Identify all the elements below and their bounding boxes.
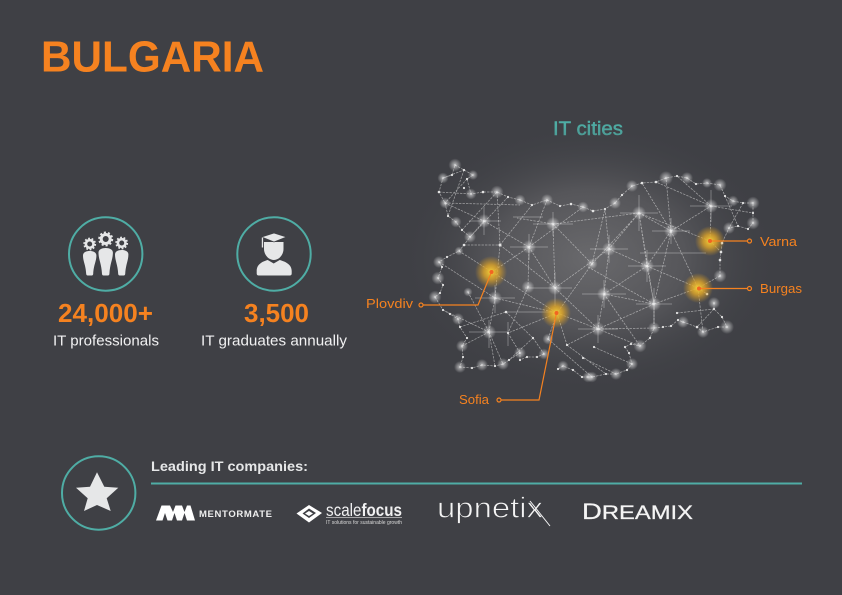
number: 3,500 xyxy=(244,298,309,328)
callout: Sofia: Sofia xyxy=(459,392,490,407)
callout: Burgas xyxy=(697,281,802,296)
number: 24,000+ xyxy=(58,298,153,328)
large nodes xyxy=(428,158,760,382)
icon: graduate xyxy=(237,217,311,291)
logo: scalefocus: scalefocus xyxy=(326,500,402,520)
city glows xyxy=(475,226,725,328)
logo: scalefocus xyxy=(296,500,402,526)
teal rule xyxy=(151,482,802,484)
logo: scalefocus: IT solutions for sustainable growth xyxy=(326,520,402,526)
callout: Varna: Varna xyxy=(760,234,798,249)
callout: Sofia xyxy=(459,311,558,407)
flares xyxy=(469,190,732,348)
heading: IT cities: IT cities xyxy=(553,118,623,140)
map: Bulgaria network xyxy=(400,123,780,393)
label: IT professionals xyxy=(53,332,159,350)
callout: Plovdiv: Plovdiv xyxy=(366,296,414,311)
small nodes xyxy=(438,169,754,378)
icon: star badge xyxy=(62,456,135,530)
stat: IT professionals xyxy=(53,217,159,350)
heading: leading companies: Leading IT companies: xyxy=(151,459,308,474)
stat: IT graduates xyxy=(201,217,347,350)
callout: Varna xyxy=(708,234,798,249)
logo: MentorMate: MENTORMATE xyxy=(199,509,272,520)
title: BULGARIA xyxy=(41,34,264,82)
callout: Plovdiv xyxy=(366,270,494,311)
logo: Dreamix: DREAMIX xyxy=(582,499,693,524)
logo: upnetix: upnetix xyxy=(437,492,544,524)
logo: MentorMate xyxy=(156,506,272,520)
label: IT graduates annually xyxy=(201,332,347,350)
callout: Burgas: Burgas xyxy=(760,281,802,296)
icon: people with gears xyxy=(69,217,142,291)
